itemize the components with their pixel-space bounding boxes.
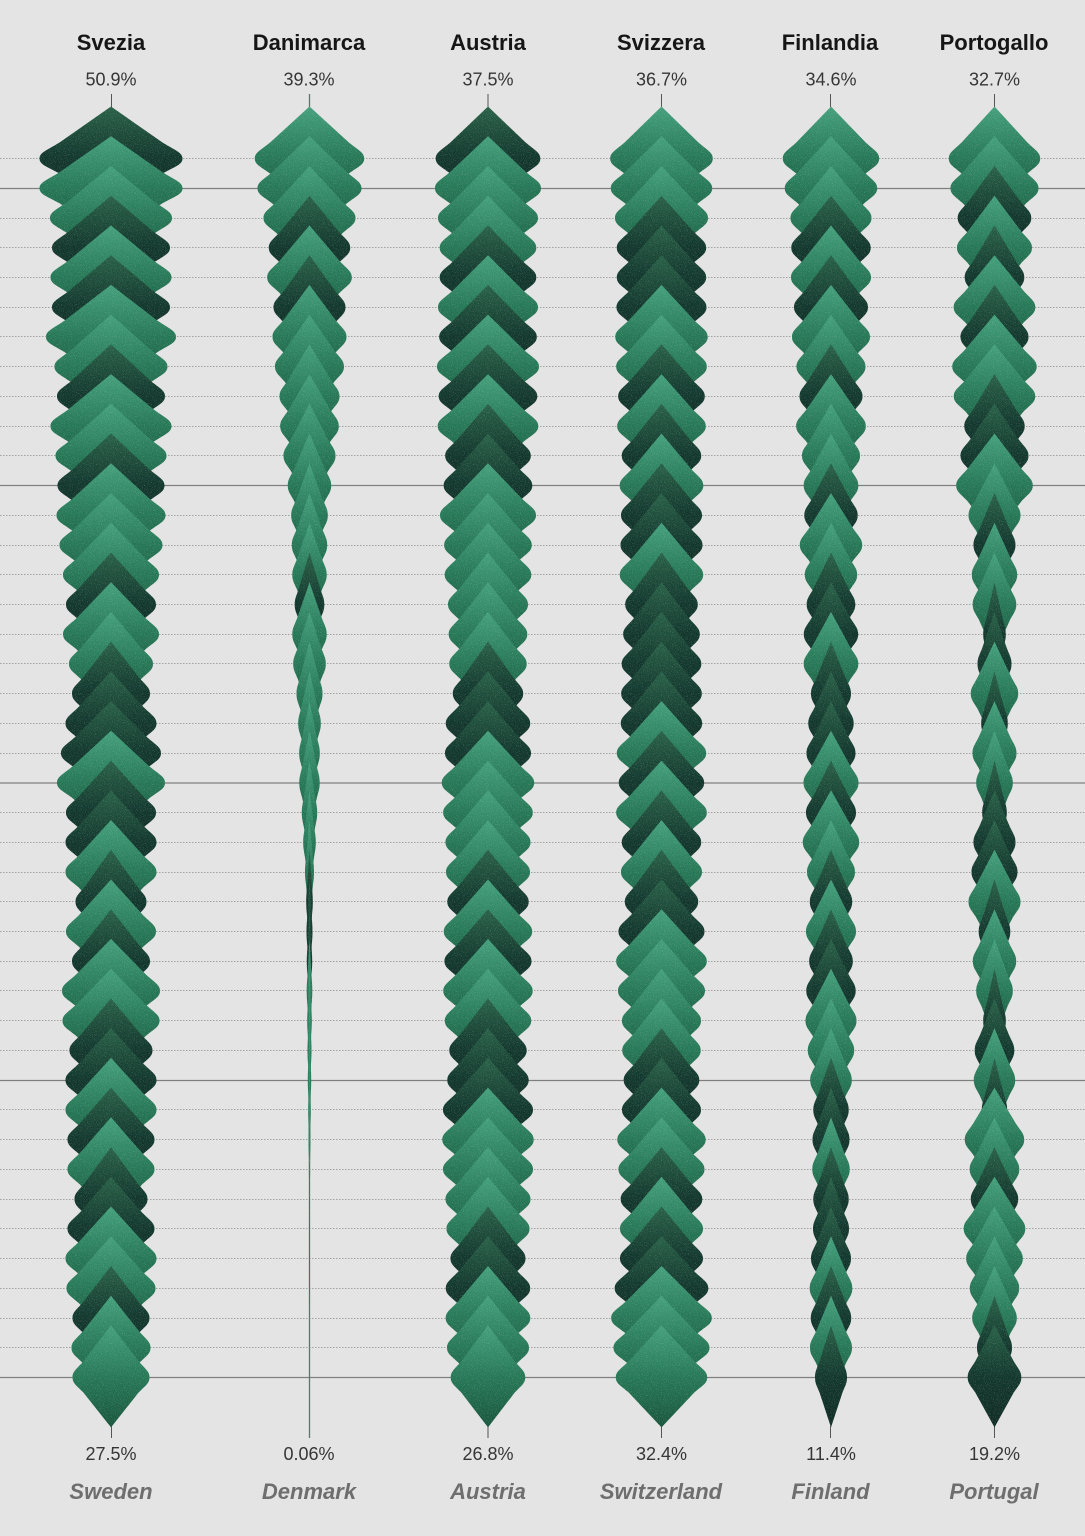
tick lines xyxy=(994,94,996,1438)
column: Austria xyxy=(435,30,541,1504)
value: 50.9%: 50.9% xyxy=(85,70,137,90)
value: 26.8%: 26.8% xyxy=(462,1444,514,1464)
value: 34.6%: 34.6% xyxy=(805,70,857,90)
value: 32.4%: 32.4% xyxy=(636,1444,687,1464)
country name: Portugal: Portugal xyxy=(949,1479,1039,1504)
value: 32.7%: 32.7% xyxy=(969,70,1020,90)
heading: Austria: Austria xyxy=(450,30,527,55)
value: 37.5%: 37.5% xyxy=(462,70,514,90)
value: 39.3%: 39.3% xyxy=(283,70,335,90)
heading: Svezia: Svezia xyxy=(77,30,146,55)
diamond stack: Svezia xyxy=(40,106,182,1427)
country name: Sweden: Sweden xyxy=(69,1479,153,1504)
heading: Danimarca: Danimarca xyxy=(253,30,366,55)
column: Svezia / Sweden xyxy=(40,30,182,1504)
diamond stack: Austria xyxy=(435,106,541,1427)
diamond stack: Danimarca xyxy=(255,106,364,1308)
column: Portogallo / Portugal xyxy=(940,30,1048,1504)
diamond stack: Portogallo xyxy=(949,106,1040,1427)
heading: Svizzera: Svizzera xyxy=(617,30,706,55)
column: Finlandia / Finland xyxy=(782,30,879,1504)
tick lines xyxy=(660,94,662,1438)
column: Svizzera / Switzerland xyxy=(600,30,723,1504)
value: 0.06%: 0.06% xyxy=(283,1444,335,1464)
tick line xyxy=(308,94,310,1438)
value: 11.4%: 11.4% xyxy=(806,1444,856,1464)
diamond stack: Svizzera xyxy=(610,106,713,1427)
tick lines xyxy=(830,94,832,1438)
dotted grid lines xyxy=(0,158,1085,1348)
value: 19.2%: 19.2% xyxy=(969,1444,1020,1464)
heading: Finlandia: Finlandia xyxy=(782,30,879,55)
country name: Switzerland: Switzerland xyxy=(600,1479,723,1504)
country name: Denmark: Denmark xyxy=(262,1479,358,1504)
solid grid lines xyxy=(0,188,1085,1378)
value: 27.5%: 27.5% xyxy=(85,1444,137,1464)
heading: Portogallo: Portogallo xyxy=(940,30,1048,55)
column: Danimarca / Denmark xyxy=(253,30,366,1504)
tick lines xyxy=(110,94,112,1438)
country name: Finland: Finland xyxy=(791,1479,870,1504)
country name: Austria: Austria xyxy=(449,1479,526,1504)
value: 36.7%: 36.7% xyxy=(636,70,687,90)
diamond stack: Finlandia xyxy=(783,106,879,1427)
tick lines xyxy=(487,94,489,1438)
